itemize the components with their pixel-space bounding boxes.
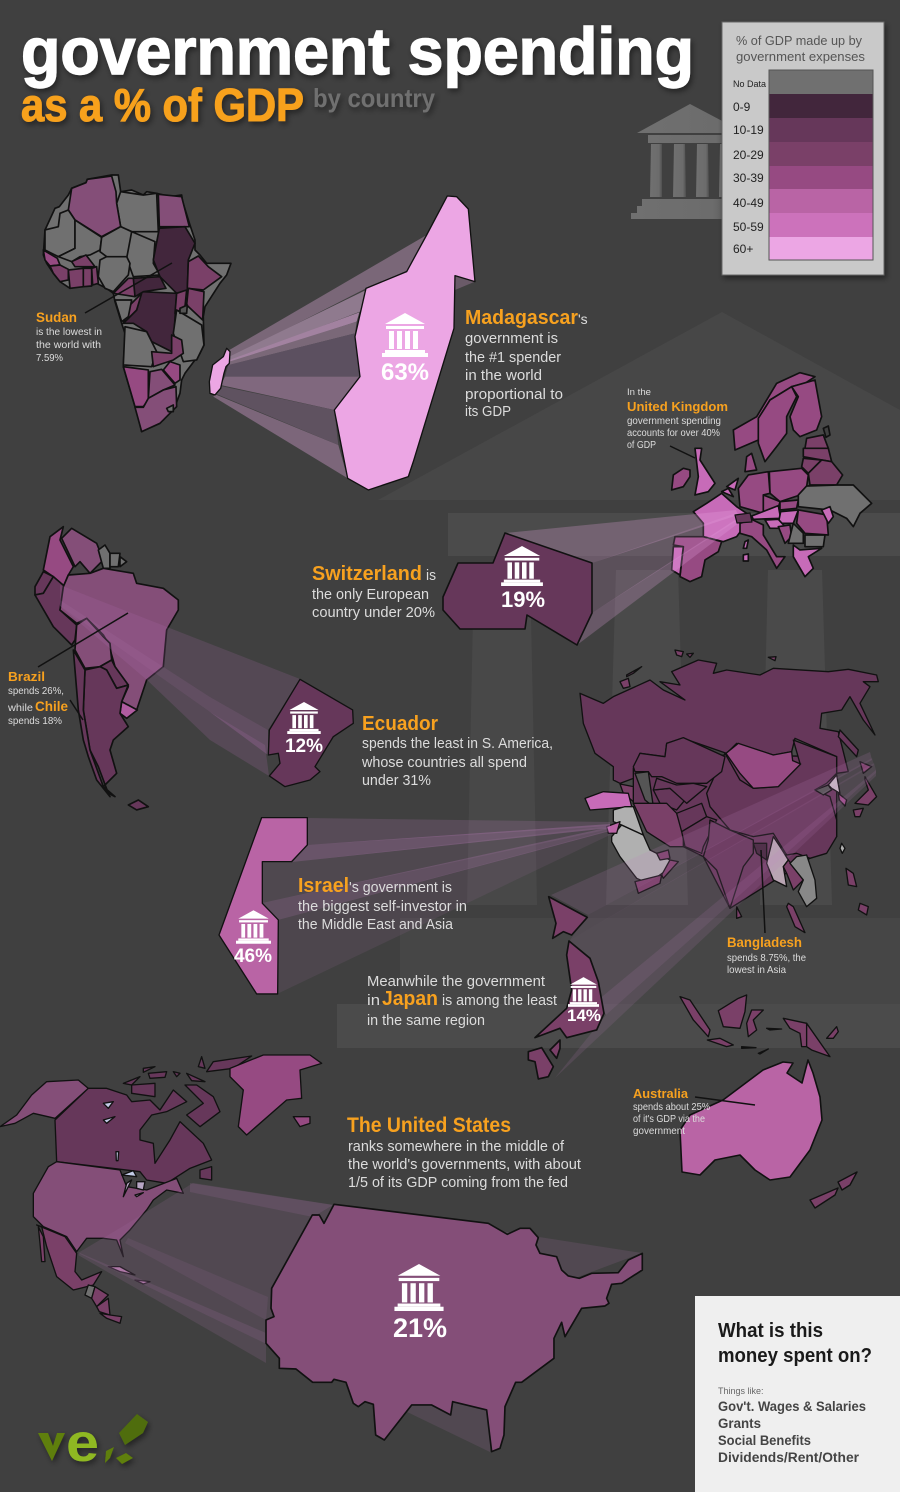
- text: Brazil and Chile callout: Brazil: [8, 669, 45, 684]
- legend panel: [722, 22, 884, 275]
- text: Brazil and Chile callout: while: [7, 702, 33, 714]
- panel: what is this money spent on: Things like:: [718, 1386, 764, 1396]
- map: small Madagascar: [209, 348, 230, 395]
- rays: Japan: [551, 752, 876, 1078]
- text: Israel: the biggest self-investor in: [298, 898, 467, 915]
- text: Bangladesh callout: Bangladesh: [727, 934, 802, 950]
- text: Ecuador: [361, 713, 553, 789]
- map: North America: [0, 1055, 322, 1323]
- text: United Kingdom callout: [627, 387, 728, 458]
- text: Madagascar: Madagascar: [465, 307, 578, 329]
- panel: what is this money spent on: What is this: [718, 1320, 823, 1342]
- text: Israel: [298, 875, 467, 933]
- text: Japan: in: [367, 992, 380, 1009]
- text: Madagascar: its GDP: [465, 403, 511, 420]
- text: Switzerland: the only European: [312, 586, 429, 603]
- legend panel: 10-19: [733, 123, 764, 137]
- text: Sudan callout: the world with: [36, 339, 101, 351]
- text: Brazil and Chile callout: Chile: [35, 698, 68, 714]
- rays: Israel: [262, 818, 612, 994]
- legend panel: 60+: [733, 242, 753, 256]
- text: Israel: Israel: [298, 875, 349, 897]
- panel: what is this money spent on: Social Benefits: [718, 1433, 811, 1448]
- text: United Kingdom callout: of GDP: [627, 439, 656, 451]
- text: Madagascar: proportional to: [465, 386, 563, 403]
- legend panel: 30-39: [733, 171, 764, 185]
- legend panel: No Data: [733, 79, 767, 90]
- map: Australia and New Zealand: [680, 1060, 857, 1208]
- text: United Kingdom callout: United Kingdom: [627, 399, 728, 414]
- panel: what is this money spent on: money spent on?: [718, 1345, 872, 1367]
- background temple silhouette: [337, 312, 900, 1048]
- big shape: Switzerland: [443, 533, 592, 645]
- big shape: Israel: 46%: [234, 946, 272, 967]
- text: Sudan callout: Sudan: [36, 309, 77, 325]
- text: Ecuador: under 31%: [362, 772, 431, 789]
- big shape: United States: 21%: [393, 1313, 447, 1343]
- text: The United States: 1/5 of its GDP coming from the fed: [348, 1174, 568, 1191]
- big shape: Ecuador: [268, 679, 353, 787]
- panel: what is this money spent on: Dividends/Rent/Other: [718, 1450, 860, 1465]
- text: Israel: the Middle East and Asia: [298, 916, 454, 933]
- text: Switzerland: Switzerland: [312, 563, 422, 585]
- text: United Kingdom callout: accounts for over 40%: [627, 427, 720, 439]
- text: Ecuador: whose countries all spend: [361, 754, 527, 771]
- rays: United States: [78, 1183, 642, 1452]
- text: Japan: in the same region: [367, 1012, 485, 1029]
- text: Madagascar: the #1 spender: [465, 349, 561, 366]
- text: Brazil and Chile callout: [7, 613, 128, 727]
- text: Australia callout: Australia: [633, 1086, 689, 1101]
- text: Australia callout: spends about 25%: [633, 1101, 710, 1113]
- rays: Ecuador: [60, 585, 300, 776]
- text: Madagascar: [465, 307, 588, 420]
- text: United Kingdom callout: In the: [627, 387, 651, 397]
- text: The United States: the world's governments, with about: [348, 1156, 582, 1173]
- map: Indonesia: [680, 995, 838, 1057]
- panel: what is this money spent on: Grants: [718, 1416, 761, 1431]
- text: Madagascar: government is: [465, 330, 558, 347]
- big shape: United States: [266, 1204, 642, 1452]
- text: Australia callout: government: [633, 1125, 685, 1137]
- big shape: Madagascar: 63%: [381, 359, 429, 386]
- text: Sudan callout: 7.59%: [36, 352, 63, 364]
- title: as a % of GDP: [21, 79, 304, 131]
- rays: Switzerland: [505, 510, 740, 645]
- legend panel: % of GDP made up by: [736, 33, 862, 48]
- text: Australia callout: [633, 1086, 755, 1137]
- text: Israel: 's government is: [349, 879, 452, 896]
- small Switzerland marker: [735, 513, 752, 523]
- text: Japan: Meanwhile the government: [367, 973, 546, 990]
- map: Europe: [672, 373, 872, 582]
- text: Japan: Japan: [382, 988, 438, 1010]
- text: Japan: [367, 973, 558, 1029]
- text: Madagascar: in the world: [465, 367, 542, 384]
- text: Australia callout: of it's GDP via the: [633, 1113, 705, 1125]
- icon: grey temple behind legend: [631, 104, 745, 219]
- text: Brazil and Chile callout: spends 26%,: [8, 685, 64, 697]
- text: Switzerland: is: [426, 567, 436, 584]
- text: Ecuador: Ecuador: [362, 713, 438, 735]
- legend panel: 0-9: [733, 100, 751, 114]
- legend panel: 20-29: [733, 148, 764, 162]
- logo: ve: e: [66, 1413, 99, 1473]
- legend panel: 40-49: [733, 196, 764, 210]
- text: The United States: [347, 1114, 582, 1191]
- text: Bangladesh callout: [727, 850, 806, 976]
- map: Africa: [43, 175, 231, 432]
- text: United Kingdom callout: government spending: [627, 415, 721, 427]
- legend panel: government expenses: [736, 49, 865, 64]
- big shape: Madagascar: [334, 196, 475, 490]
- title: by country: [313, 83, 435, 113]
- logo: ve: [38, 1413, 148, 1473]
- legend panel: 50-59: [733, 220, 764, 234]
- text: Bangladesh callout: spends 8.75%, the: [727, 952, 806, 964]
- title: government spending: [21, 14, 694, 88]
- text: Madagascar: 's: [578, 311, 588, 327]
- map: South America: [35, 527, 178, 810]
- text: Japan: is among the least: [442, 992, 558, 1009]
- panel: what is this money spent on: Gov't. Wages & Salaries: [718, 1399, 866, 1414]
- map: Asia: [580, 650, 878, 933]
- rays: Madagascar: [213, 235, 475, 478]
- big shape: Switzerland: 19%: [501, 587, 545, 612]
- text: Ecuador: spends the least in S. America,: [362, 735, 553, 752]
- big shape: Ecuador: 12%: [285, 736, 323, 757]
- title: [21, 14, 694, 131]
- text: Bangladesh callout: lowest in Asia: [727, 964, 786, 976]
- big shape: Israel: [219, 818, 307, 994]
- big shape: Japan: 14%: [567, 1006, 601, 1025]
- text: Sudan callout: [36, 263, 172, 364]
- text: The United States: ranks somewhere in the middle of: [348, 1138, 565, 1155]
- text: Sudan callout: is the lowest in: [36, 326, 102, 338]
- text: Switzerland: country under 20%: [312, 604, 435, 621]
- panel: what is this money spent on: [695, 1296, 900, 1492]
- text: The United States: The United States: [347, 1114, 511, 1137]
- text: Brazil and Chile callout: spends 18%: [8, 715, 62, 727]
- text: Switzerland: [312, 563, 436, 621]
- big shape: Japan: [528, 897, 604, 1079]
